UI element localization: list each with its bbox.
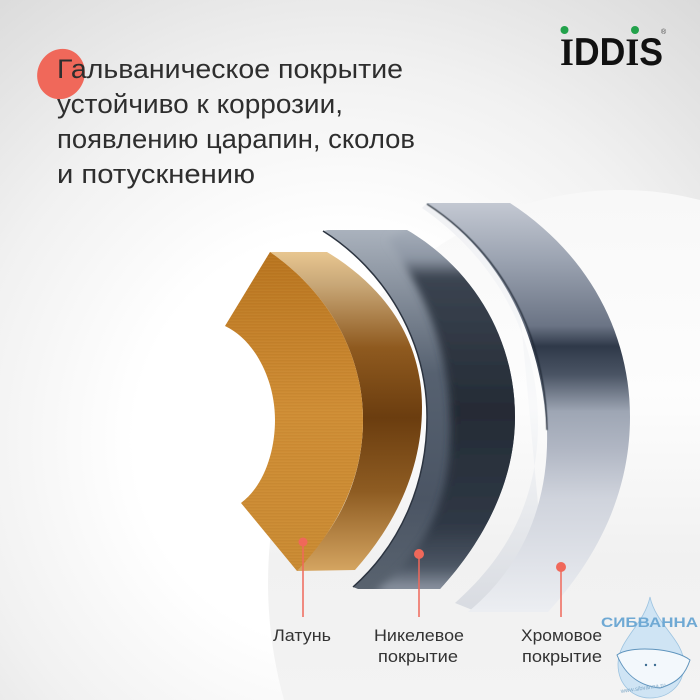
callout: chrome: [521, 562, 602, 666]
accent blob: [29, 41, 93, 107]
heading: [29, 41, 415, 189]
heading text: появлению царапин, сколов: [57, 124, 415, 154]
heading text: и потускнению: [57, 159, 255, 189]
brass face: [225, 252, 363, 571]
heading text: [57, 54, 415, 189]
watermark: Sibvanna: [601, 597, 698, 698]
chrome face: [427, 203, 630, 612]
callout: brass: [273, 538, 331, 645]
watermark: Sibvanna: СИБВАННА: [601, 615, 698, 630]
nickel layer: [322, 230, 515, 589]
callout: nickel: Никелевое: [374, 627, 464, 645]
heading text: устойчиво к коррозии,: [57, 89, 343, 119]
brass layer: [225, 252, 422, 571]
callout: nickel: покрытие: [378, 648, 458, 666]
callout: nickel: [374, 549, 464, 666]
nickel lip: [323, 230, 515, 589]
logo: IDDIS: IDDIS: [560, 31, 663, 74]
callout: brass: Латунь: [273, 627, 331, 645]
chrome layer: [422, 203, 630, 612]
chrome lip: [422, 203, 548, 612]
nickel dark band: [376, 230, 515, 589]
watermark: Sibvanna: www.sibvanna.ru: [619, 683, 666, 695]
heading text: Гальваническое покрытие: [57, 54, 403, 84]
callout: chrome: покрытие: [522, 648, 602, 666]
callout: chrome: Хромовое: [521, 627, 602, 645]
brass side: [270, 252, 422, 571]
logo: IDDIS: ®: [661, 28, 667, 36]
